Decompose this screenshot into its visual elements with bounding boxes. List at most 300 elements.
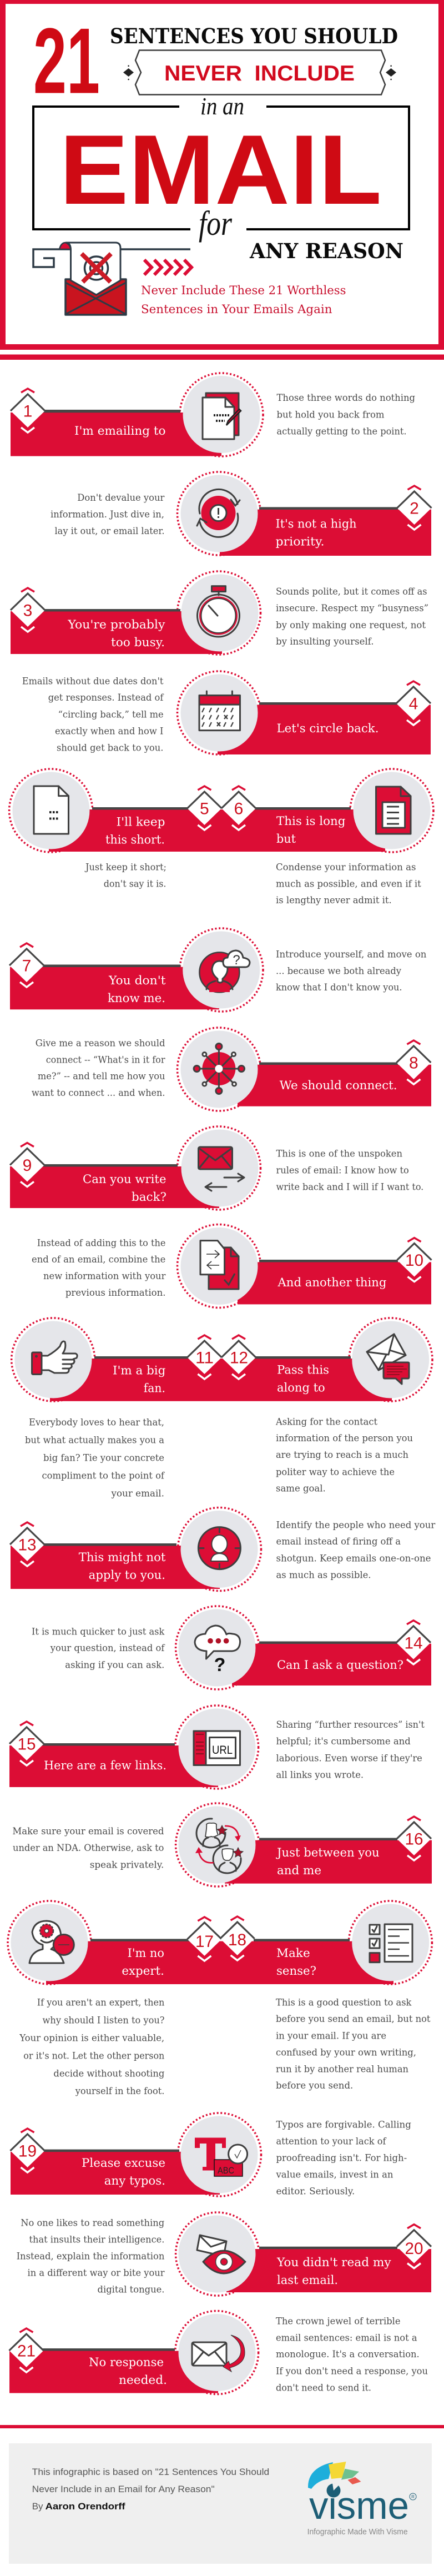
heading <box>79 1551 166 1582</box>
heading 11 <box>113 1364 165 1395</box>
icon: envelope and arrows <box>199 1147 244 1191</box>
number diamond: 3 <box>23 602 32 620</box>
body text: end of an email, combine the <box>32 1254 165 1265</box>
body text <box>12 1826 164 1870</box>
dark bar <box>39 965 180 967</box>
grey discs <box>12 772 431 849</box>
grey disc <box>179 1709 255 1785</box>
dotted rings <box>8 1901 432 1984</box>
body text: don't need to send it. <box>276 2383 371 2394</box>
body text: Typos are forgivable. Calling <box>276 2119 411 2130</box>
body text: The crown jewel of terrible <box>276 2316 401 2327</box>
red band <box>225 1840 432 1884</box>
icon: short document <box>34 786 69 834</box>
grey disc <box>181 1030 258 1108</box>
body text 17: decide without shooting <box>53 2068 165 2079</box>
black frame around EMAIL <box>33 107 409 229</box>
icon: connected nodes <box>194 1044 244 1094</box>
body text: as much as possible. <box>276 1570 371 1581</box>
icon: envelope with return arrow <box>192 2335 245 2372</box>
body text: Don't devalue your <box>77 492 165 504</box>
dark bar <box>39 2150 179 2152</box>
red band <box>238 1262 431 1304</box>
dotted ring <box>175 1705 259 1789</box>
heading 18 <box>276 1946 316 1978</box>
title line 1: SENTENCES YOU SHOULD <box>110 24 398 48</box>
number diamond: 9 <box>23 1156 32 1175</box>
body text <box>17 2217 165 2296</box>
body text: helpful; it's cumbersome and <box>276 1736 411 1747</box>
visme logo: R <box>411 2494 415 2499</box>
grey disc <box>181 574 259 652</box>
heading 18: sense? <box>276 1964 316 1978</box>
for script text: for <box>199 205 233 243</box>
number diamond: 10 <box>405 1251 423 1270</box>
number diamond: 7 <box>22 957 31 975</box>
heading: Here are a few links. <box>44 1759 167 1772</box>
icon: document and pen <box>203 393 241 439</box>
number diamond 12 <box>221 1335 256 1379</box>
heading: any typos. <box>104 2174 165 2187</box>
dotted ring <box>178 1028 261 1111</box>
body text 12: politer way to achieve the <box>276 1467 395 1478</box>
body text <box>276 2316 428 2394</box>
body text: “circling back,” tell me <box>58 710 164 721</box>
icon: two people exchanging <box>195 1819 243 1873</box>
number diamond <box>397 1817 431 1860</box>
number diamond: 14 <box>404 1634 423 1652</box>
row 3: You're probably too busy <box>11 571 428 655</box>
body text: This is one of the unspoken <box>276 1148 402 1159</box>
credit text: Never Include in an Email for Any Reason" <box>32 2484 215 2494</box>
body text 18: confused by your own writing, <box>276 2047 416 2058</box>
number diamond <box>397 486 432 530</box>
red band <box>11 611 222 654</box>
number diamond <box>10 2129 44 2172</box>
body text 11: Everybody loves to hear that, <box>29 1417 164 1428</box>
body text 17: Your opinion is either valuable, <box>19 2032 164 2044</box>
body text: email instead of firing off a <box>276 1536 401 1547</box>
header red frame <box>0 0 444 350</box>
dark bar <box>259 1641 397 1644</box>
heading: Can I ask a question? <box>277 1658 403 1672</box>
body text <box>276 586 428 647</box>
body text 12: same goal. <box>276 1483 326 1495</box>
body text 5 <box>84 862 167 889</box>
body text: attention to your lack of <box>276 2136 387 2147</box>
body text 18: before you send. <box>276 2080 353 2091</box>
heading: We should connect. <box>280 1079 397 1092</box>
icon: question cloud <box>195 1626 240 1676</box>
heading 17: expert. <box>122 1964 164 1978</box>
dark bar <box>39 2348 175 2351</box>
heading: and me <box>277 1864 321 1877</box>
body text <box>276 1719 425 1780</box>
body text 6: is lengthy never admit it. <box>276 895 392 906</box>
number diamond <box>397 1238 432 1282</box>
grey disc <box>181 1511 258 1588</box>
body text: Identify the people who need your <box>276 1520 436 1531</box>
credit text: This infographic is based on "21 Sentences You Should <box>32 2467 269 2477</box>
body text 18: run it by another real human <box>276 2064 408 2075</box>
dotted ring <box>178 671 261 754</box>
heading: Can you write <box>83 1173 167 1186</box>
row 9: Can you write back <box>10 1126 423 1210</box>
body text: that insults their intelligence. <box>29 2234 164 2245</box>
body text: new information with your <box>43 1271 166 1282</box>
red band <box>50 1359 392 1401</box>
body text: under an NDA. Otherwise, ask to <box>13 1843 164 1854</box>
red band <box>10 967 219 1009</box>
red band <box>218 705 431 754</box>
dark bar <box>259 1838 397 1840</box>
big number 21: 21 <box>33 9 100 113</box>
row 2: It's not a high priority <box>51 472 432 556</box>
row 21: No response needed <box>9 2311 428 2394</box>
number diamond: 19 <box>18 2142 37 2161</box>
body text: actually getting to the point. <box>276 426 406 437</box>
number diamond <box>9 2328 43 2372</box>
body text: shotgun. Keep emails one-on-one <box>276 1553 431 1564</box>
body text: lay it out, or email later. <box>54 526 164 537</box>
body text <box>276 2119 411 2197</box>
heading 6 <box>276 814 345 846</box>
number diamond <box>396 1040 431 1084</box>
number diamond: 4 <box>409 695 418 713</box>
heading: Just between you <box>276 1846 380 1859</box>
dark bar <box>39 410 180 412</box>
body text 12: Asking for the contact <box>275 1416 377 1427</box>
icon: target on person <box>198 1527 240 1569</box>
grey discs <box>11 1904 429 1981</box>
body text: speak privately. <box>90 1859 164 1870</box>
dark bar <box>39 1543 176 1546</box>
visme logo: visme <box>309 2484 409 2527</box>
body text 18: This is a good question to ask <box>276 1997 412 2008</box>
number diamond 11: 11 <box>195 1349 214 1367</box>
body text <box>22 676 164 753</box>
body text 18: in your email. If you are <box>276 2031 386 2042</box>
heading 12: Pass this <box>277 1364 329 1377</box>
red band <box>46 1941 393 1984</box>
heading 12: along to <box>277 1381 325 1395</box>
row 10: And another thing <box>32 1225 432 1308</box>
header second stripe <box>0 354 444 360</box>
body text: Those three words do nothing <box>276 393 415 404</box>
heading: apply to you. <box>89 1568 165 1582</box>
heading 11: I'm a big <box>113 1364 165 1377</box>
grey discs <box>14 1321 429 1398</box>
heading: needed. <box>119 2373 167 2387</box>
red band <box>9 2351 218 2393</box>
body text 11: your email. <box>111 1488 164 1500</box>
body text <box>276 1148 423 1193</box>
body text <box>51 492 165 537</box>
body text 17: or it's not. Let the other person <box>23 2050 164 2061</box>
body text 6: Condense your information as <box>276 862 416 873</box>
heading 17 <box>122 1946 164 1978</box>
number diamond 5 <box>187 786 221 830</box>
never include banner: NEVER INCLUDE <box>164 62 355 85</box>
grey disc <box>179 1609 255 1687</box>
red band <box>226 2249 431 2292</box>
visme logo: Infographic Made With Visme <box>307 2527 408 2537</box>
heading: It's not a high <box>275 517 356 530</box>
dotted ring <box>178 1126 261 1210</box>
body text: Give me a reason we should <box>36 1038 165 1049</box>
body text: get responses. Instead of <box>48 692 164 703</box>
grey disc <box>179 2215 255 2293</box>
icon: typography check: ABC <box>218 2165 234 2176</box>
dark bar <box>39 1164 178 1167</box>
dotted ring <box>180 928 263 1012</box>
rows 11 and 12: big fan and pass along <box>12 1318 432 1500</box>
row 1: I'm emailing to <box>11 373 415 456</box>
in an script text: in an <box>200 93 244 120</box>
number diamond 12: 12 <box>230 1349 248 1367</box>
icon: question cloud: ? <box>214 1654 225 1676</box>
body text 6: much as possible, and even if it <box>276 878 421 889</box>
dark bar <box>259 1063 398 1065</box>
row 7: You don't know me <box>9 928 426 1012</box>
row 20: You didn't read my last email <box>17 2212 431 2296</box>
dotted ring <box>178 1508 261 1591</box>
body text <box>32 1626 165 1671</box>
heading 5: this short. <box>105 833 165 846</box>
credit text <box>32 2467 269 2512</box>
red band <box>11 412 221 456</box>
heading 17: I'm no <box>128 1946 164 1960</box>
subtitle <box>141 284 346 316</box>
body text <box>32 1237 166 1299</box>
body text 6 <box>276 862 421 906</box>
body text <box>276 1520 436 1581</box>
body text: in a different way or bite your <box>28 2268 165 2279</box>
heading 18: Make <box>276 1946 310 1960</box>
body text: Introduce yourself, and move on <box>276 949 426 960</box>
icon: head with gear <box>29 1921 74 1963</box>
icon: stopwatch <box>198 586 240 637</box>
icon: long document <box>376 787 411 834</box>
body text: monologue. It's a conversation. <box>276 2349 420 2360</box>
heading: Let's circle back. <box>276 722 379 735</box>
number diamond: 8 <box>409 1054 418 1073</box>
icon: envelope and eye <box>197 2235 245 2273</box>
body text 18: before you send an email, but not <box>276 2014 431 2025</box>
body text 12 <box>275 1416 413 1495</box>
heading: You're probably <box>67 618 165 631</box>
body text 11: big fan? Tie your concrete <box>43 1452 164 1463</box>
body text <box>276 949 426 993</box>
grey disc <box>179 1807 255 1883</box>
body text: information. Just dive in, <box>51 509 164 520</box>
icon: checklist <box>370 1924 412 1963</box>
heading <box>276 1846 380 1877</box>
body text: If you don't need a response, you <box>276 2366 428 2377</box>
number diamond 6: 6 <box>234 799 243 818</box>
body text 11: but what actually makes you a <box>25 1435 164 1446</box>
red band <box>10 1166 219 1208</box>
body text 5: Just keep it short; <box>84 862 167 873</box>
number diamond 18 <box>220 1916 255 1960</box>
body text: want to connect ... and when. <box>32 1088 165 1099</box>
body text 11 <box>25 1417 165 1500</box>
icon: calendar <box>199 691 240 731</box>
dotted ring <box>176 2212 259 2296</box>
number diamond 17 <box>187 1917 221 1961</box>
dotted ring <box>178 472 261 555</box>
EMAIL word: EMAIL <box>59 114 382 225</box>
subtitle: Sentences in Your Emails Again <box>141 303 332 316</box>
heading 6: This is long <box>276 814 345 828</box>
heading: You don't <box>108 974 166 987</box>
heading: know me. <box>108 992 165 1005</box>
dark bar <box>259 507 398 510</box>
number diamond <box>11 389 45 432</box>
heading <box>82 2156 165 2187</box>
header panel <box>0 0 444 360</box>
body text: insecure. Respect my “busyness” <box>276 603 428 614</box>
number diamond 11 <box>187 1335 221 1379</box>
grey disc <box>181 2116 258 2193</box>
dark bars <box>94 1356 351 1359</box>
body text: asking if you can ask. <box>65 1660 164 1671</box>
dotted ring <box>178 1225 261 1308</box>
red band <box>11 2152 220 2195</box>
body text: rules of email: I know how to <box>276 1165 409 1176</box>
heading: back? <box>132 1190 167 1204</box>
heading 5 <box>105 815 165 846</box>
row 15: Here are a few links <box>9 1705 425 1789</box>
number diamond <box>10 1143 44 1187</box>
body text: all links you wrote. <box>276 1769 364 1780</box>
heading <box>108 974 166 1005</box>
body text: Make sure your email is covered <box>12 1826 164 1837</box>
dark bars <box>92 807 351 809</box>
dotted rings <box>9 769 433 852</box>
rows 5 and 6: short and long <box>9 769 433 906</box>
row 4: Let's circle back <box>22 671 431 754</box>
heading 11: fan. <box>144 1381 165 1395</box>
body text 17: why should I listen to you? <box>42 2015 164 2026</box>
body text 12: information of the person you <box>276 1433 413 1444</box>
heading: And another thing <box>277 1276 386 1289</box>
row 14: Can I ask a question <box>32 1606 431 1689</box>
footer panel <box>9 2443 432 2564</box>
number diamond: 15 <box>18 1735 36 1753</box>
body text <box>32 1038 165 1099</box>
red band <box>49 809 385 852</box>
body text: proofreading isn't. For high- <box>276 2153 407 2164</box>
heading: last email. <box>277 2273 338 2287</box>
visme logo <box>307 2462 416 2537</box>
rows 17 and 18: no expert and make sense <box>8 1901 432 2097</box>
heading 12 <box>277 1364 329 1395</box>
any reason: ANY REASON <box>249 239 403 263</box>
subtitle: Never Include These 21 Worthless <box>141 284 346 297</box>
dotted ring <box>178 571 261 655</box>
icon: priority arrows <box>197 489 240 537</box>
dotted rings <box>12 1318 432 1401</box>
dotted ring <box>176 1606 259 1689</box>
body text 18 <box>276 1997 431 2091</box>
dark bar <box>259 2247 397 2249</box>
heading: Please excuse <box>82 2156 165 2170</box>
grey disc <box>183 376 260 453</box>
dark bar <box>39 1743 175 1745</box>
dotted ring <box>175 2311 259 2394</box>
icon: person with question cloud <box>199 950 250 992</box>
icon: merging documents <box>200 1241 239 1289</box>
dotted ring <box>180 373 263 456</box>
number diamond 18: 18 <box>228 1931 246 1949</box>
number diamond: 1 <box>23 402 32 421</box>
icon: thumbs up <box>32 1341 77 1375</box>
footer red stripe <box>0 2425 444 2428</box>
body text: digital tongue. <box>98 2285 164 2296</box>
row 13: This might not apply to you <box>10 1508 436 1591</box>
red band <box>238 1065 431 1106</box>
icon: envelope and message <box>367 1334 409 1384</box>
number diamond 17: 17 <box>195 1933 214 1951</box>
dark bar <box>259 702 398 705</box>
number diamond: 21 <box>17 2342 36 2361</box>
body text: Sounds polite, but it comes off as <box>276 586 427 597</box>
body text: know that I don't know you. <box>276 982 402 993</box>
never include banner <box>123 50 396 94</box>
heading: too busy. <box>111 636 165 649</box>
body text: Emails without due dates don't <box>22 676 164 687</box>
red band <box>11 1546 220 1589</box>
red band <box>232 1644 431 1686</box>
credit text: Aaron Orendorff <box>46 2501 125 2512</box>
number diamond <box>396 681 431 725</box>
number diamond: 20 <box>405 2240 423 2258</box>
number diamond 5: 5 <box>200 799 209 818</box>
number diamond <box>10 1522 44 1566</box>
body text: editor. Seriously. <box>276 2186 355 2197</box>
body text: laborious. Even worse if they're <box>276 1753 422 1764</box>
body text 12: are trying to reach is a much <box>276 1450 408 1461</box>
grey disc <box>179 2314 255 2391</box>
body text: previous information. <box>65 1287 166 1299</box>
grey disc <box>181 1129 259 1207</box>
number diamond: 2 <box>410 500 419 517</box>
grey disc <box>181 674 258 752</box>
body text 17: If you aren't an expert, then <box>37 1997 164 2008</box>
grey disc <box>183 932 260 1008</box>
body text: value emails, invest in an <box>276 2170 393 2181</box>
body text: Sharing “further resources” isn't <box>276 1719 425 1730</box>
dark bars <box>90 1939 350 1941</box>
heading 6: but <box>276 832 296 846</box>
heading <box>275 517 356 548</box>
icon: URL window: URL <box>212 1744 233 1757</box>
grey disc <box>181 475 258 552</box>
heading <box>276 2256 391 2287</box>
body text 17: yourself in the foot. <box>75 2086 164 2097</box>
red band <box>220 510 431 556</box>
row 8: We should connect <box>32 1028 431 1111</box>
body text: No one likes to read something <box>21 2217 164 2228</box>
icon: typography check <box>195 2137 248 2176</box>
body text 5: don't say it is. <box>104 878 167 889</box>
number diamond <box>396 1621 431 1664</box>
dark bar <box>259 1260 398 1262</box>
heading <box>89 2356 167 2387</box>
body text: me?” -- and tell me how you <box>38 1071 165 1082</box>
row 19: Please excuse any typos <box>10 2113 411 2197</box>
